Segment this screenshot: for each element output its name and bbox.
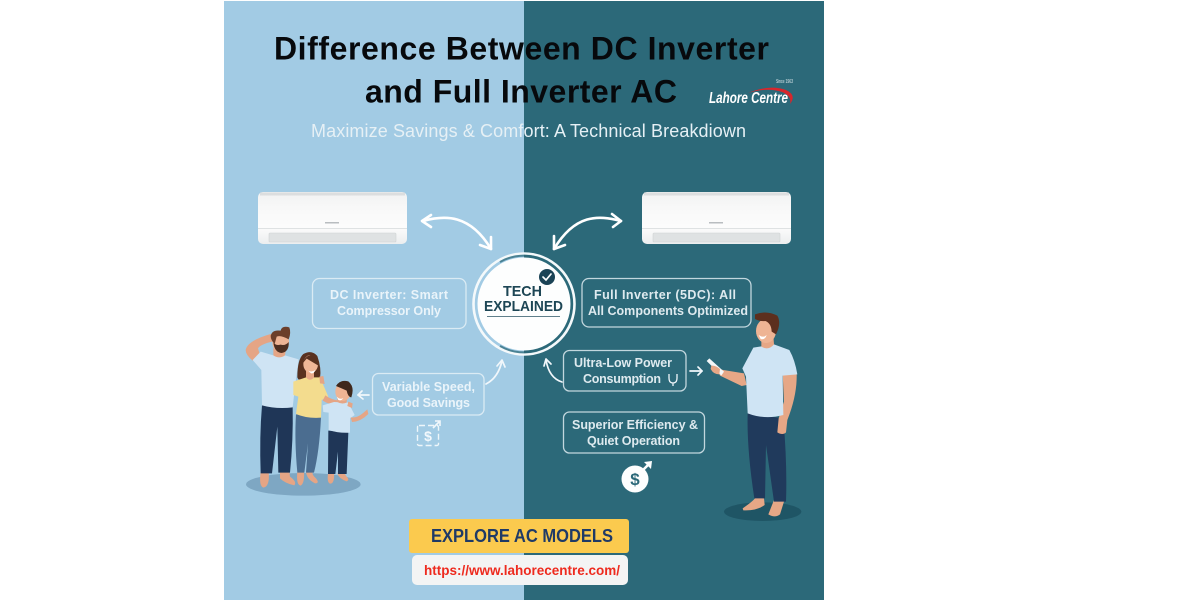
callout: superior efficiency bbox=[564, 412, 704, 453]
callout: variable speed bbox=[372, 374, 484, 415]
icon: dollar growth: $ bbox=[630, 470, 640, 489]
air conditioner: left bbox=[258, 192, 407, 244]
title: and Full Inverter AC bbox=[365, 74, 677, 110]
callout: superior efficiency: Superior Efficiency & bbox=[572, 418, 698, 432]
panel: DC inverter background bbox=[224, 1, 524, 600]
icon: check badge bbox=[539, 269, 555, 285]
icon: plug bbox=[669, 374, 677, 386]
callout: superior efficiency: Quiet Operation bbox=[587, 434, 680, 448]
callout: full inverter: All Components Optimized bbox=[588, 304, 748, 318]
title: Difference Between DC Inverter bbox=[274, 30, 769, 66]
subtitle: Maximize Savings & Comfort: A Technical Breakdiown bbox=[311, 121, 746, 141]
arrow: left AC to badge bbox=[422, 215, 491, 249]
callout: full inverter bbox=[582, 278, 751, 327]
logo: Lahore Centre: Since 1963 bbox=[776, 79, 793, 85]
icon: savings square bbox=[418, 421, 440, 446]
arrow: variable speed to family bbox=[358, 391, 369, 399]
illustration: man with remote bbox=[707, 312, 801, 521]
arrow: ultra-low power to remote bbox=[690, 367, 702, 375]
callout: DC inverter bbox=[312, 278, 466, 328]
link: website url bbox=[412, 555, 628, 585]
logo: Lahore Centre: Lahore Centre bbox=[709, 90, 788, 107]
callout: DC inverter: DC Inverter: Smart bbox=[330, 288, 449, 302]
logo: Lahore Centre bbox=[709, 79, 793, 107]
arrow: ultra-low power to badge bbox=[544, 359, 562, 382]
button: explore AC models bbox=[409, 519, 629, 553]
callout: ultra-low power: Consumption bbox=[583, 372, 661, 386]
panel: full inverter background bbox=[524, 1, 824, 600]
air conditioner: right bbox=[642, 192, 791, 244]
title bbox=[274, 30, 769, 110]
callout: full inverter: Full Inverter (5DC): All bbox=[594, 288, 736, 302]
illustration: family bbox=[246, 327, 368, 496]
callout: DC inverter: Compressor Only bbox=[337, 304, 441, 318]
callout: ultra-low power: Ultra-Low Power bbox=[574, 356, 672, 370]
callout: variable speed: Good Savings bbox=[387, 396, 470, 410]
callout: variable speed: Variable Speed, bbox=[382, 380, 475, 394]
woman bbox=[293, 352, 340, 486]
callout: ultra-low power bbox=[564, 350, 686, 391]
arrow: variable speed to badge bbox=[486, 360, 505, 384]
center badge: tech explained: TECH bbox=[503, 283, 542, 300]
boy bbox=[323, 381, 368, 484]
man bbox=[246, 327, 299, 488]
icon: savings square: $ bbox=[424, 428, 432, 444]
center badge: tech explained: EXPLAINED bbox=[484, 298, 563, 315]
icon: dollar growth bbox=[622, 461, 652, 492]
center badge: tech explained bbox=[474, 254, 574, 354]
arrow: right AC to badge bbox=[554, 214, 621, 249]
button: explore AC models: EXPLORE AC MODELS bbox=[431, 526, 613, 546]
link: website url: https://www.lahorecentre.com/ bbox=[424, 563, 620, 578]
